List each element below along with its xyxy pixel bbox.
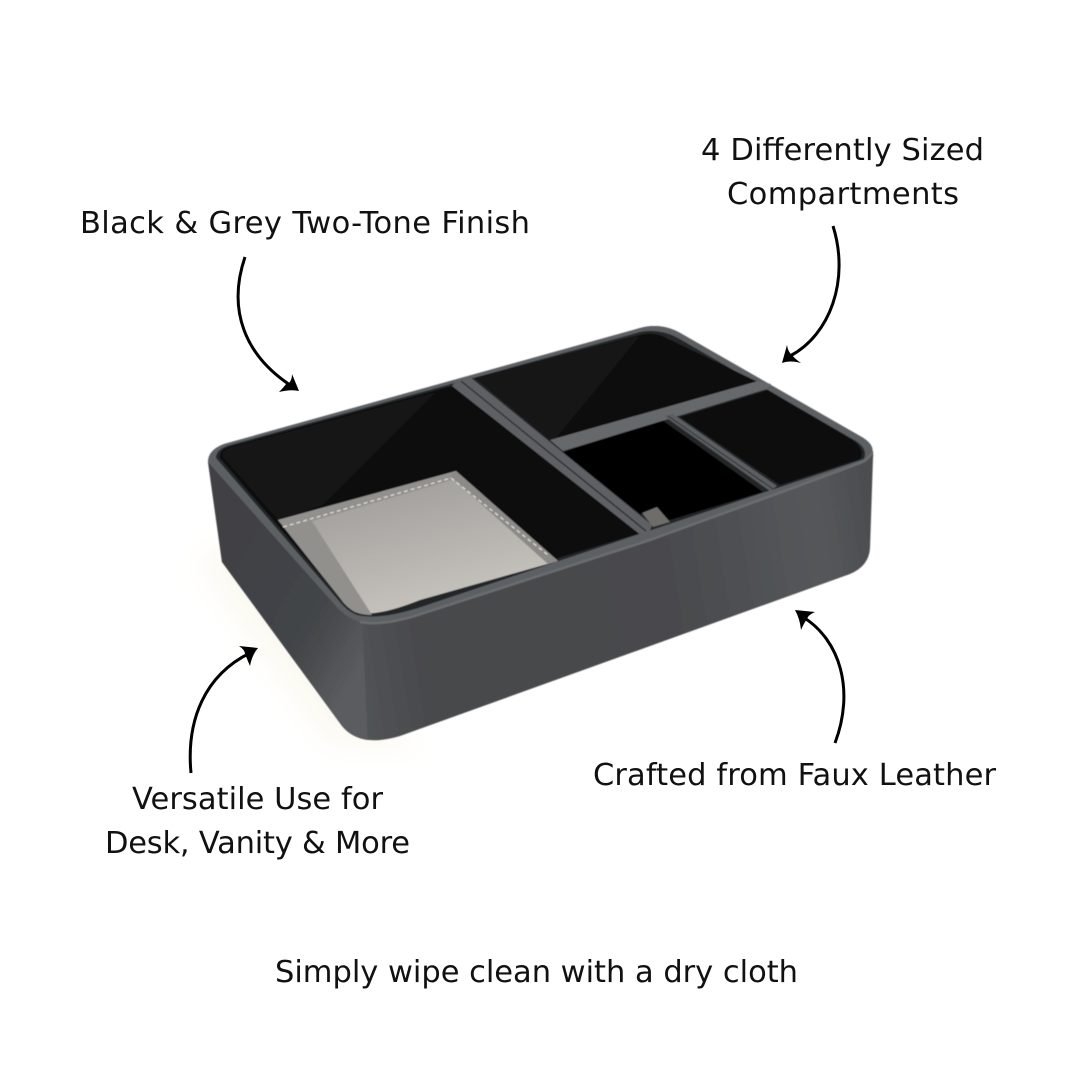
horizontal divider — [550, 381, 771, 451]
footer note: Simply wipe clean with a dry cloth — [275, 955, 798, 990]
floor stitching — [283, 478, 548, 555]
label: faux leather: Crafted from Faux Leather — [593, 758, 996, 793]
arrow: to back wall — [238, 257, 299, 392]
product photo: leather tray — [208, 326, 873, 740]
right compartment — [680, 390, 862, 485]
rim highlight along the front — [360, 453, 872, 623]
middle compartment — [563, 420, 763, 520]
rear compartment — [475, 334, 758, 440]
callout: versatile use — [105, 646, 410, 861]
label: two-tone finish: Black & Grey Two-Tone Finish — [80, 206, 530, 241]
left compartment grey floor — [278, 471, 558, 614]
callout: compartments — [701, 133, 984, 363]
soft table shadow — [195, 540, 420, 750]
main divider seam — [461, 381, 646, 531]
rear compartment lighter wall — [475, 336, 640, 440]
callout: two-tone finish — [80, 206, 530, 392]
middle compartment floor glimpse — [642, 507, 670, 527]
inner rim line — [216, 331, 865, 617]
left compartment lighter back wall — [222, 392, 436, 520]
small divider seam — [668, 416, 773, 489]
tray outer body — [208, 326, 873, 740]
left compartment walls — [220, 386, 640, 614]
arrow: to front face — [795, 610, 844, 743]
label: compartments line 2: Compartments — [727, 177, 959, 212]
floor shadow strips — [278, 471, 462, 615]
tray top rim — [208, 326, 872, 623]
callout: faux leather — [593, 610, 996, 793]
arrow: to left side — [190, 646, 258, 773]
small divider — [664, 414, 777, 491]
label: versatile line 1: Versatile Use for — [132, 782, 383, 817]
label: versatile line 2: Desk, Vanity & More — [105, 826, 410, 861]
tray left side face — [208, 462, 368, 740]
label: compartments line 1: 4 Differently Sized — [701, 133, 984, 168]
main divider — [452, 377, 652, 536]
arrow: to compartments — [782, 226, 839, 363]
